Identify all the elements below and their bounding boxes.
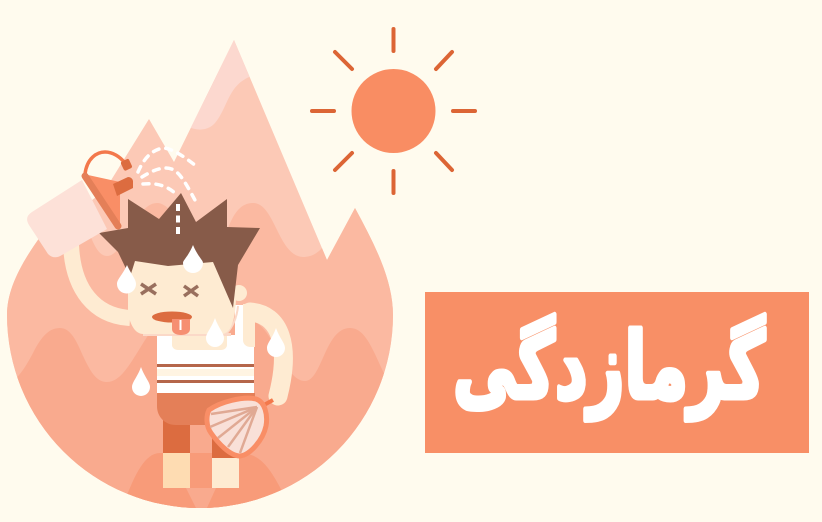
shirt stripes bbox=[157, 364, 254, 367]
middle wave layer bbox=[7, 203, 393, 508]
light wedge between feet bbox=[186, 488, 216, 510]
mouth and tongue bbox=[152, 312, 192, 322]
head bbox=[128, 255, 236, 334]
legs bbox=[163, 420, 190, 456]
spout bbox=[88, 175, 120, 224]
title banner bbox=[425, 292, 809, 453]
bucket body bbox=[27, 180, 107, 257]
water stream dashes bbox=[138, 148, 196, 234]
sweat drops bbox=[117, 245, 285, 396]
bottom hill bbox=[128, 453, 282, 508]
flame with mountain peaks bbox=[0, 30, 400, 520]
bucket handle bbox=[85, 152, 124, 174]
hand fan bbox=[207, 398, 273, 456]
socks bbox=[163, 453, 190, 488]
bucket rim bbox=[85, 176, 118, 226]
raised arm bbox=[71, 245, 130, 318]
character bbox=[71, 193, 283, 488]
hair bbox=[99, 193, 260, 308]
tank top bbox=[157, 335, 254, 393]
eyes bbox=[141, 284, 198, 296]
shoulder bbox=[243, 304, 255, 347]
light peak tip bbox=[191, 41, 250, 130]
neck shadow bbox=[143, 333, 231, 336]
shorts bbox=[157, 393, 255, 425]
lower wave layer bbox=[17, 320, 384, 508]
watering bucket bbox=[27, 152, 133, 257]
flame lower rim bbox=[15, 375, 385, 513]
right arm bbox=[250, 312, 283, 396]
sun bbox=[312, 29, 475, 193]
